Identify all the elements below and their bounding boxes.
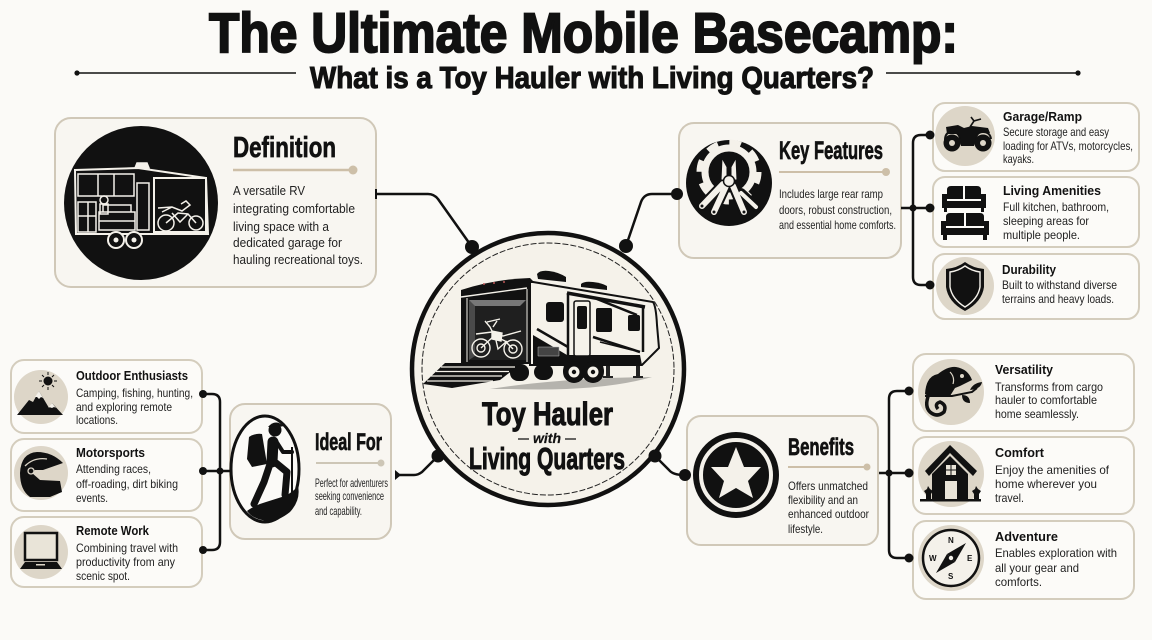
- central hub: [412, 233, 684, 505]
- hub label: Living Quarters: [469, 441, 625, 476]
- text: ideal for body: [315, 476, 388, 518]
- panel: garage/ramp: [933, 103, 1139, 171]
- icon: compass: S: [948, 572, 954, 581]
- subtitle: What is a Toy Hauler with Living Quarters?: [310, 60, 874, 95]
- panel: ideal for: [230, 404, 391, 539]
- text: comfort body: Enjoy the amenities of: [995, 463, 1110, 477]
- icon: star badge: [693, 432, 779, 518]
- text: motorsports body: Attending races,: [76, 462, 151, 476]
- panel: comfort: [913, 437, 1134, 514]
- text: remote body: scenic spot.: [76, 569, 130, 583]
- icon: motorcycle in garage: [158, 201, 203, 231]
- heading rule: [788, 464, 870, 470]
- icon: hiker: [231, 416, 299, 522]
- heading: definition: Definition: [233, 132, 336, 164]
- text: outdoor body: locations.: [76, 413, 118, 427]
- panel: key features: [679, 123, 901, 258]
- text: ideal for body: seeking convenience: [315, 489, 384, 503]
- text: comfort body: [995, 463, 1110, 505]
- text: outdoor body: Camping, fishing, hunting,: [76, 386, 193, 400]
- heading: comfort: Comfort: [995, 446, 1045, 460]
- icon: sofas: [941, 186, 989, 240]
- icon: compass: N: [948, 536, 954, 545]
- text: key features body: doors, robust construction,: [779, 203, 892, 217]
- hub nodes: [432, 239, 662, 462]
- text: living body: sleeping areas for: [1003, 214, 1089, 228]
- text: benefits body: flexibility and an: [788, 493, 858, 507]
- text: benefits body: lifestyle.: [788, 522, 823, 536]
- icon: gear and multitool: [686, 140, 772, 226]
- heading: outdoor enthusiasts: Outdoor Enthusiasts: [76, 369, 188, 383]
- heading: remote work: Remote Work: [76, 524, 149, 538]
- text: benefits body: enhanced outdoor: [788, 507, 869, 521]
- text: versatility body: [995, 380, 1103, 421]
- icon: helmet: [14, 446, 68, 500]
- icon: compass: [918, 525, 984, 591]
- text: definition body: A versatile RV: [233, 183, 305, 198]
- hub label: Toy Hauler: [482, 396, 613, 432]
- panel: remote work: [11, 517, 202, 587]
- text: definition body: dedicated garage for: [233, 235, 343, 250]
- text: comfort body: travel.: [995, 491, 1024, 505]
- hub label: with: [533, 430, 561, 446]
- heading: durability: Durability: [1002, 263, 1056, 277]
- text: garage body: Secure storage and easy: [1003, 125, 1109, 139]
- icon: ATV: [935, 106, 995, 166]
- panel: adventure: [913, 521, 1134, 599]
- icon: laptop: [14, 525, 68, 579]
- icon: shield: [936, 257, 994, 315]
- panel: definition: [55, 118, 376, 287]
- text: adventure body: Enables exploration with: [995, 546, 1117, 560]
- text: garage body: [1003, 125, 1133, 166]
- garage: [461, 278, 534, 364]
- text: outdoor body: [76, 386, 193, 427]
- connector: key features to hub: [626, 188, 683, 246]
- panel: versatility: [913, 354, 1134, 431]
- text: remote body: [76, 541, 178, 583]
- text: key features body: Includes large rear ramp: [779, 187, 883, 201]
- text: versatility body: home seamlessly.: [995, 407, 1079, 421]
- connector: ideal for branches: [199, 390, 230, 554]
- text: benefits body: Offers unmatched: [788, 479, 868, 493]
- left title rule: [74, 70, 296, 76]
- text: durability body: terrains and heavy loads.: [1002, 292, 1114, 306]
- text: benefits body: [788, 479, 869, 536]
- text: versatility body: hauler to comfortable: [995, 393, 1097, 407]
- text: definition body: [233, 183, 363, 267]
- heading rule: [316, 460, 384, 466]
- panel: outdoor enthusiasts: [11, 360, 202, 433]
- panel: motorsports: [11, 439, 202, 511]
- text: remote body: Combining travel with: [76, 541, 178, 555]
- body: [530, 282, 659, 365]
- icon: house: [918, 441, 984, 507]
- icon: trailer cutaway: [64, 126, 218, 280]
- text: definition body: hauling recreational toys.: [233, 252, 363, 267]
- ramp: [423, 363, 522, 388]
- text: key features body: and essential home comforts.: [779, 218, 896, 232]
- text: remote body: productivity from any: [76, 555, 175, 569]
- text: ideal for body: and capability.: [315, 504, 362, 518]
- text: adventure body: comforts.: [995, 575, 1042, 589]
- text: comfort body: home wherever you: [995, 477, 1097, 491]
- heading: key features: Key Features: [779, 137, 883, 165]
- motorcycle in garage: [472, 319, 522, 358]
- heading: garage/ramp: Garage/Ramp: [1003, 110, 1082, 124]
- illustration: toy hauler RV: [423, 271, 659, 390]
- heading: versatility: Versatility: [995, 363, 1053, 377]
- text: definition body: living space with a: [233, 219, 330, 234]
- text: motorsports body: off-roading, dirt biking: [76, 477, 178, 491]
- hub label: [469, 396, 625, 476]
- connector: ideal for to hub: [395, 456, 438, 480]
- connector: key features branches: [901, 130, 934, 290]
- text: living body: [1003, 200, 1109, 242]
- heading rule: [233, 166, 358, 174]
- heading: ideal for: Ideal For: [315, 429, 382, 456]
- connector: benefits to hub: [655, 456, 691, 481]
- text: adventure body: [995, 546, 1117, 589]
- text: versatility body: Transforms from cargo: [995, 380, 1103, 394]
- text: key features body: [779, 187, 896, 232]
- text: living body: multiple people.: [1003, 228, 1080, 242]
- text: durability body: [1002, 278, 1117, 306]
- heading: benefits: Benefits: [788, 434, 854, 461]
- panel: benefits: [687, 416, 878, 545]
- heading: motorsports: Motorsports: [76, 446, 145, 460]
- text: adventure body: all your gear and: [995, 561, 1079, 575]
- icon: chameleon: [918, 359, 984, 425]
- icon: compass: E: [967, 554, 973, 563]
- heading: living amenities: Living Amenities: [1003, 184, 1101, 198]
- text: living body: Full kitchen, bathroom,: [1003, 200, 1109, 214]
- text: ideal for body: Perfect for adventurers: [315, 476, 388, 490]
- panel: living amenities: [933, 177, 1139, 247]
- connector: benefits branches: [879, 386, 914, 562]
- text: motorsports body: events.: [76, 491, 108, 505]
- text: motorsports body: [76, 462, 178, 505]
- text: outdoor body: and exploring remote: [76, 400, 172, 414]
- icon: compass: W: [929, 554, 937, 563]
- right title rule: [886, 70, 1081, 76]
- text: durability body: Built to withstand diverse: [1002, 278, 1117, 292]
- heading: adventure: Adventure: [995, 530, 1058, 544]
- text: definition body: integrating comfortable: [233, 201, 355, 216]
- title: The Ultimate Mobile Basecamp:: [209, 1, 958, 64]
- heading rule: [779, 168, 890, 176]
- connector: definition to hub: [376, 189, 472, 247]
- panel: durability: [933, 254, 1139, 319]
- text: garage body: kayaks.: [1003, 152, 1034, 166]
- icon: mountains and sun: [14, 370, 68, 424]
